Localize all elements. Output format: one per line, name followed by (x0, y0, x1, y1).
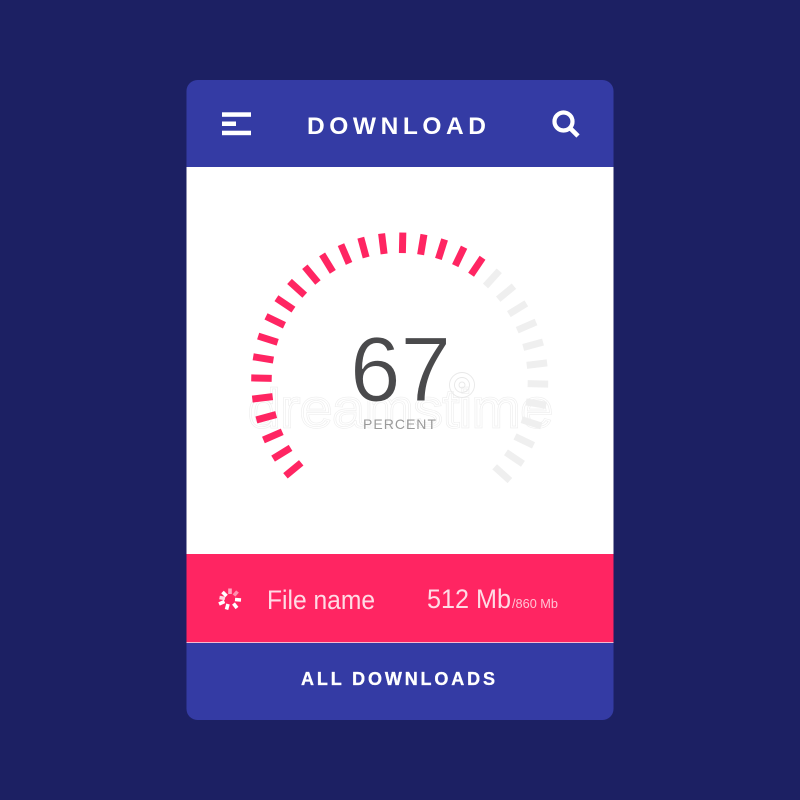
chart: progress ticks, active (251, 233, 483, 476)
button label: all downloads: ALL DOWNLOADS (301, 669, 495, 689)
value: downloaded size: 512 Mb (427, 584, 511, 614)
divider line (186, 642, 614, 643)
panel: gauge area (186, 167, 614, 554)
panel: app card (186, 80, 614, 720)
label: file name: File name (267, 585, 375, 615)
panel: footer button (186, 643, 614, 720)
panel: file progress bar (186, 554, 614, 642)
big number: 67: 67 (350, 319, 451, 421)
panel: header bar (186, 80, 614, 167)
chart: progress ticks, remaining (486, 271, 548, 481)
label: percent: PERCENT (363, 416, 436, 432)
watermark: dreamstime (248, 379, 553, 439)
icon: spinner (219, 588, 241, 610)
watermark (249, 372, 552, 429)
watermark: dreamstime (248, 379, 553, 439)
icon: search (554, 112, 578, 136)
value: total size: /860 Mb (512, 597, 558, 611)
heading: download: DOWNLOAD (307, 113, 486, 140)
icon: hamburger menu (222, 112, 251, 135)
